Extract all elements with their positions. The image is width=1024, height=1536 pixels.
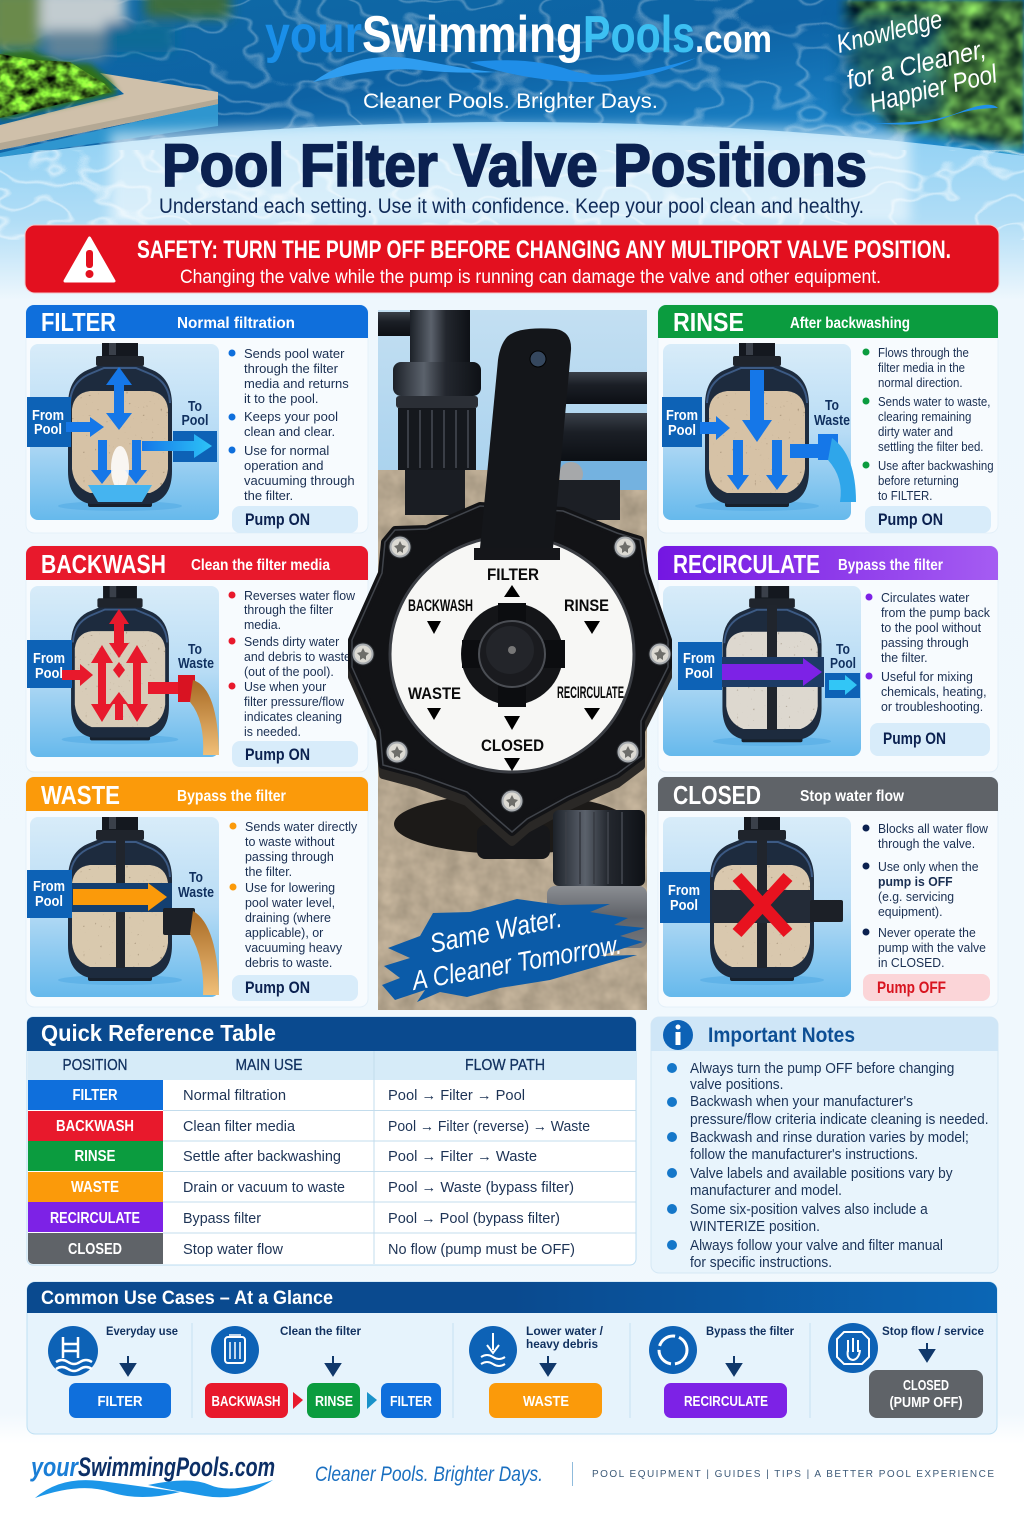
waste flow diagram: To <box>189 870 203 886</box>
rinse bullets: Flows through the <box>878 345 969 360</box>
backwash bullets: filter pressure/flow <box>244 695 345 709</box>
backwash flow diagram: Pool <box>35 665 63 682</box>
panel: BACKWASH: BACKWASH <box>41 549 166 579</box>
closed flow diagram <box>660 817 851 997</box>
rinse flow diagram: Waste <box>814 413 850 429</box>
use case: lower water <box>469 1324 604 1418</box>
filter pump status: Pump ON <box>245 511 310 529</box>
waste bullets: to waste without <box>245 834 335 849</box>
backwash bullets: is needed. <box>244 725 301 739</box>
filter bullets: the filter. <box>244 488 293 503</box>
handwritten tagline: Happier Pool <box>866 58 1001 118</box>
use case: bypass: Bypass the filter <box>706 1324 794 1338</box>
recirculate bullets: Useful for mixing <box>881 670 973 684</box>
panel: WASTE: WASTE <box>41 780 120 810</box>
panel: WASTE: Bypass the filter <box>177 788 286 805</box>
notes list: for specific instructions. <box>690 1254 832 1270</box>
waste bullets: debris to waste. <box>245 955 332 970</box>
recirculate bullets: Circulates water <box>881 591 969 605</box>
filter flow diagram: Pool <box>182 413 208 429</box>
panel: RECIRCULATE: Bypass the filter <box>838 557 943 574</box>
rinse bullets: Sends water to waste, <box>878 394 990 409</box>
notes list <box>667 1060 989 1270</box>
recirculate bullets: chemicals, heating, <box>881 685 987 699</box>
use case: clean the filter: BACKWASH <box>212 1393 280 1410</box>
use case: stop flow: CLOSED <box>903 1377 949 1394</box>
valve dial: WASTE <box>408 684 461 703</box>
notes list: follow the manufacturer's instructions. <box>690 1146 918 1162</box>
use case: everyday <box>48 1324 178 1418</box>
quick reference table: No flow (pump must be OFF) <box>388 1241 575 1258</box>
filter bullets: Keeps your pool <box>244 409 338 424</box>
filter bullets: vacuuming through <box>244 473 355 488</box>
waste bullets <box>230 819 358 970</box>
closed bullets: (e.g. servicing <box>878 890 954 904</box>
recirculate flow diagram: To <box>836 642 850 658</box>
panel: CLOSED: Stop water flow <box>800 788 904 805</box>
valve dial: FILTER <box>487 565 539 584</box>
footer tagline: Cleaner Pools. Brighter Days. <box>315 1463 543 1486</box>
waste flow diagram: Pool <box>35 893 63 910</box>
quick reference table: WASTE <box>71 1179 119 1196</box>
closed bullets: pump with the valve <box>878 941 986 955</box>
quick reference table: Stop water flow <box>183 1241 283 1258</box>
footer logo: SwimmingPools.com <box>78 1452 275 1482</box>
quick reference table: RINSE <box>74 1148 116 1165</box>
notes list: Backwash and rinse duration varies by model; <box>690 1129 969 1145</box>
rinse bullets: before returning <box>878 473 959 488</box>
closed bullets: Use only when the <box>878 860 978 874</box>
panel: important notes <box>27 1017 998 1498</box>
rinse bullets: filter media in the <box>878 360 965 375</box>
backwash bullets: (out of the pool). <box>244 665 334 679</box>
waste bullets: applicable), or <box>245 925 324 940</box>
notes list: Valve labels and available positions vary by <box>690 1165 953 1181</box>
quick reference table: BACKWASH <box>56 1118 134 1135</box>
notes list: manufacturer and model. <box>690 1182 842 1198</box>
quick reference table: Drain or vacuum to waste <box>183 1179 345 1196</box>
waste bullets: pool water level, <box>245 895 335 910</box>
recirculate flow diagram <box>663 586 861 756</box>
quick reference table: Pool → Filter → Waste <box>388 1148 537 1165</box>
quick reference table: Settle after backwashing <box>183 1148 341 1165</box>
notes list: WINTERIZE position. <box>690 1218 820 1234</box>
backwash bullets <box>228 589 356 739</box>
recirculate bullets: passing through <box>881 636 969 650</box>
use case: stop flow: Stop flow / service <box>882 1324 984 1338</box>
waste bullets: passing through <box>245 849 334 864</box>
backwash bullets: media. <box>244 618 281 632</box>
rinse bullets <box>862 345 994 503</box>
valve handle <box>474 328 571 560</box>
rinse pump status <box>865 506 991 533</box>
quick reference table: Bypass filter <box>183 1210 261 1227</box>
backwash bullets: Use when your <box>244 680 326 694</box>
recirculate pump status <box>870 723 990 756</box>
filter bullets: Use for normal <box>244 443 329 458</box>
waste bullets: Use for lowering <box>245 880 335 895</box>
notes list: Some six-position valves also include a <box>690 1201 928 1217</box>
use case: everyday: FILTER <box>98 1393 143 1410</box>
backwash pump status: Pump ON <box>245 746 310 764</box>
valve dial: RECIRCULATE <box>557 683 624 702</box>
use case: bypass: RECIRCULATE <box>684 1393 768 1410</box>
quick reference table: RECIRCULATE <box>50 1210 140 1227</box>
backwash flow diagram: To <box>188 642 202 658</box>
quick reference table <box>27 1017 636 1265</box>
filter flow diagram: To <box>188 399 202 415</box>
handwritten tagline: for a Cleaner, <box>844 34 989 95</box>
recirculate flow diagram: Pool <box>830 656 856 672</box>
brush banner slogan: Same Water. <box>427 903 565 959</box>
closed bullets: Blocks all water flow <box>878 822 989 836</box>
filter flow diagram: Pool <box>34 421 62 438</box>
safety banner: Changing the valve while the pump is running can damage the valve and other equipment. <box>180 267 881 288</box>
logo: Pools <box>583 6 695 64</box>
quick reference table: CLOSED <box>68 1241 122 1258</box>
recirculate bullets: from the pump back <box>881 606 991 620</box>
title: Pool Filter Valve Positions <box>162 132 867 199</box>
use case: clean the filter <box>205 1324 441 1418</box>
rinse bullets: to FILTER. <box>878 488 932 503</box>
header pool photo <box>0 0 1024 160</box>
closed flow diagram: From <box>668 882 700 899</box>
rinse flow diagram: Pool <box>668 422 696 439</box>
quick reference table: Pool → Waste (bypass filter) <box>388 1179 574 1196</box>
rinse flow diagram: From <box>666 407 698 424</box>
rinse flow diagram: To <box>825 398 839 414</box>
filter flow diagram <box>27 343 219 520</box>
closed bullets: pump is OFF <box>878 875 953 889</box>
rinse pump status: Pump ON <box>878 511 943 529</box>
closed bullets: through the valve. <box>878 837 975 851</box>
footer logo: your <box>29 1452 79 1482</box>
panel: RECIRCULATE <box>658 546 998 772</box>
brush banner slogan <box>382 899 645 1002</box>
panel: CLOSED <box>658 777 998 1007</box>
rinse bullets: dirty water and <box>878 424 953 439</box>
logo <box>265 6 772 113</box>
footer logo <box>29 1452 275 1498</box>
backwash bullets: indicates cleaning <box>244 710 342 724</box>
waste bullets: draining (where <box>245 910 331 925</box>
waste bullets: Sends water directly <box>245 819 358 834</box>
quick reference table: Pool → Pool (bypass filter) <box>388 1210 560 1227</box>
center valve photo <box>352 310 671 1010</box>
backwash bullets: through the filter <box>244 603 333 617</box>
rinse flow diagram <box>662 343 856 520</box>
backwash bullets: Sends dirty water <box>244 635 339 649</box>
use case: stop flow <box>828 1323 984 1418</box>
panel: common use cases: Common Use Cases – At a Glance <box>41 1288 333 1309</box>
notes list: Backwash when your manufacturer's <box>690 1093 913 1109</box>
use case: stop flow: (PUMP OFF) <box>890 1394 963 1411</box>
filter bullets: through the filter <box>244 361 339 376</box>
recirculate flow diagram: Pool <box>685 665 713 682</box>
closed bullets: equipment). <box>878 905 943 919</box>
use case: clean the filter: FILTER <box>390 1393 432 1410</box>
use case: everyday: Everyday use <box>106 1324 178 1338</box>
quick reference table: Quick Reference Table <box>41 1020 276 1046</box>
panel: RINSE: After backwashing <box>790 315 910 332</box>
use case: lower water: WASTE <box>523 1393 569 1410</box>
safety banner <box>25 225 999 293</box>
panel: FILTER: Normal filtration <box>177 315 295 332</box>
quick reference table: MAIN USE <box>236 1057 302 1074</box>
recirculate flow diagram: From <box>683 650 715 667</box>
backwash bullets: and debris to waste <box>244 650 351 664</box>
recirculate bullets <box>866 591 991 714</box>
panel: BACKWASH <box>26 546 368 772</box>
closed bullets <box>862 822 989 970</box>
panel: RINSE <box>658 305 998 533</box>
rinse bullets: settling the filter bed. <box>878 439 983 454</box>
closed pump status <box>863 974 990 1001</box>
brush banner slogan: A Cleaner Tomorrow. <box>408 930 624 996</box>
backwash bullets: Reverses water flow <box>244 589 356 603</box>
logo: Swimming <box>362 6 583 64</box>
filter bullets: Sends pool water <box>244 346 345 361</box>
valve dial <box>352 506 671 859</box>
use case: clean the filter: RINSE <box>315 1393 353 1410</box>
filter bullets <box>228 346 355 503</box>
filter bullets: media and returns <box>244 376 349 391</box>
waste flow diagram: Waste <box>178 885 214 901</box>
notes list: pressure/flow criteria indicate cleaning is needed. <box>690 1111 989 1127</box>
closed bullets: in CLOSED. <box>878 956 945 970</box>
panel: RINSE: RINSE <box>673 307 744 337</box>
logo: Cleaner Pools. Brighter Days. <box>363 90 658 113</box>
waste flow diagram: From <box>33 878 65 895</box>
icon: warning triangle <box>65 238 114 281</box>
waste flow diagram <box>27 817 219 997</box>
valve dial: RINSE <box>564 596 609 615</box>
filter bullets: operation and <box>244 458 324 473</box>
footer links: POOL EQUIPMENT | GUIDES | TIPS | A BETTER POOL EXPERIENCE <box>592 1469 994 1480</box>
subtitle: Understand each setting. Use it with confidence. Keep your pool clean and healthy. <box>159 195 864 218</box>
rinse bullets: Use after backwashing <box>878 458 994 473</box>
logo: your <box>265 6 362 64</box>
rippled water band below header <box>0 122 1024 300</box>
waste bullets: the filter. <box>245 864 292 879</box>
notes list: valve positions. <box>690 1076 783 1092</box>
waste pump status: Pump ON <box>245 979 310 997</box>
panel: WASTE <box>26 777 368 1007</box>
quick reference table: Normal filtration <box>183 1087 286 1104</box>
closed flow diagram: Pool <box>670 897 698 914</box>
panel: CLOSED: CLOSED <box>673 780 761 810</box>
waste bullets: vacuuming heavy <box>245 940 343 955</box>
valve dial: BACKWASH <box>408 596 473 615</box>
handwritten tagline <box>833 4 1001 125</box>
panel: RECIRCULATE: RECIRCULATE <box>673 549 820 579</box>
recirculate pump status: Pump ON <box>883 730 946 748</box>
valve dial: CLOSED <box>481 736 544 755</box>
panel: FILTER <box>26 305 368 533</box>
panel: FILTER: FILTER <box>41 307 116 337</box>
recirculate bullets: to the pool without <box>881 621 982 635</box>
backwash flow diagram <box>27 586 219 757</box>
panel: common use cases <box>27 1282 997 1434</box>
notes list: Always follow your valve and filter manual <box>690 1237 943 1253</box>
panel: BACKWASH: Clean the filter media <box>191 557 330 574</box>
use case: bypass <box>649 1324 794 1418</box>
panel: important notes: Important Notes <box>708 1024 855 1047</box>
filter bullets: clean and clear. <box>244 424 335 439</box>
rinse bullets: normal direction. <box>878 375 963 390</box>
logo: .com <box>695 19 772 61</box>
recirculate bullets: the filter. <box>881 651 928 665</box>
closed bullets: Never operate the <box>878 926 976 940</box>
filter bullets: it to the pool. <box>244 391 318 406</box>
icon: info <box>663 1020 693 1050</box>
rinse bullets: clearing remaining <box>878 409 972 424</box>
quick reference table: Pool → Filter → Pool <box>388 1087 525 1104</box>
use case: lower water: heavy debris <box>526 1337 598 1351</box>
waste pump status <box>232 975 358 1001</box>
quick reference table: Clean filter media <box>183 1118 296 1135</box>
backwash flow diagram: From <box>33 650 65 667</box>
notes list: Always turn the pump OFF before changing <box>690 1060 954 1076</box>
quick reference table: FLOW PATH <box>465 1057 545 1074</box>
backwash flow diagram: Waste <box>178 656 214 672</box>
recirculate bullets: or troubleshooting. <box>881 700 983 714</box>
closed pump status: Pump OFF <box>877 979 946 997</box>
handwritten tagline: Knowledge <box>833 4 945 59</box>
filter pump status <box>232 506 358 533</box>
quick reference table: Pool → Filter (reverse) → Waste <box>388 1118 590 1135</box>
filter flow diagram: From <box>32 407 64 424</box>
quick reference table: FILTER <box>72 1087 118 1104</box>
use case: lower water: Lower water / <box>526 1324 604 1338</box>
use case: clean the filter: Clean the filter <box>280 1324 361 1338</box>
backwash pump status <box>232 741 358 767</box>
quick reference table: POSITION <box>62 1057 128 1074</box>
outlet union fitting <box>547 810 647 948</box>
